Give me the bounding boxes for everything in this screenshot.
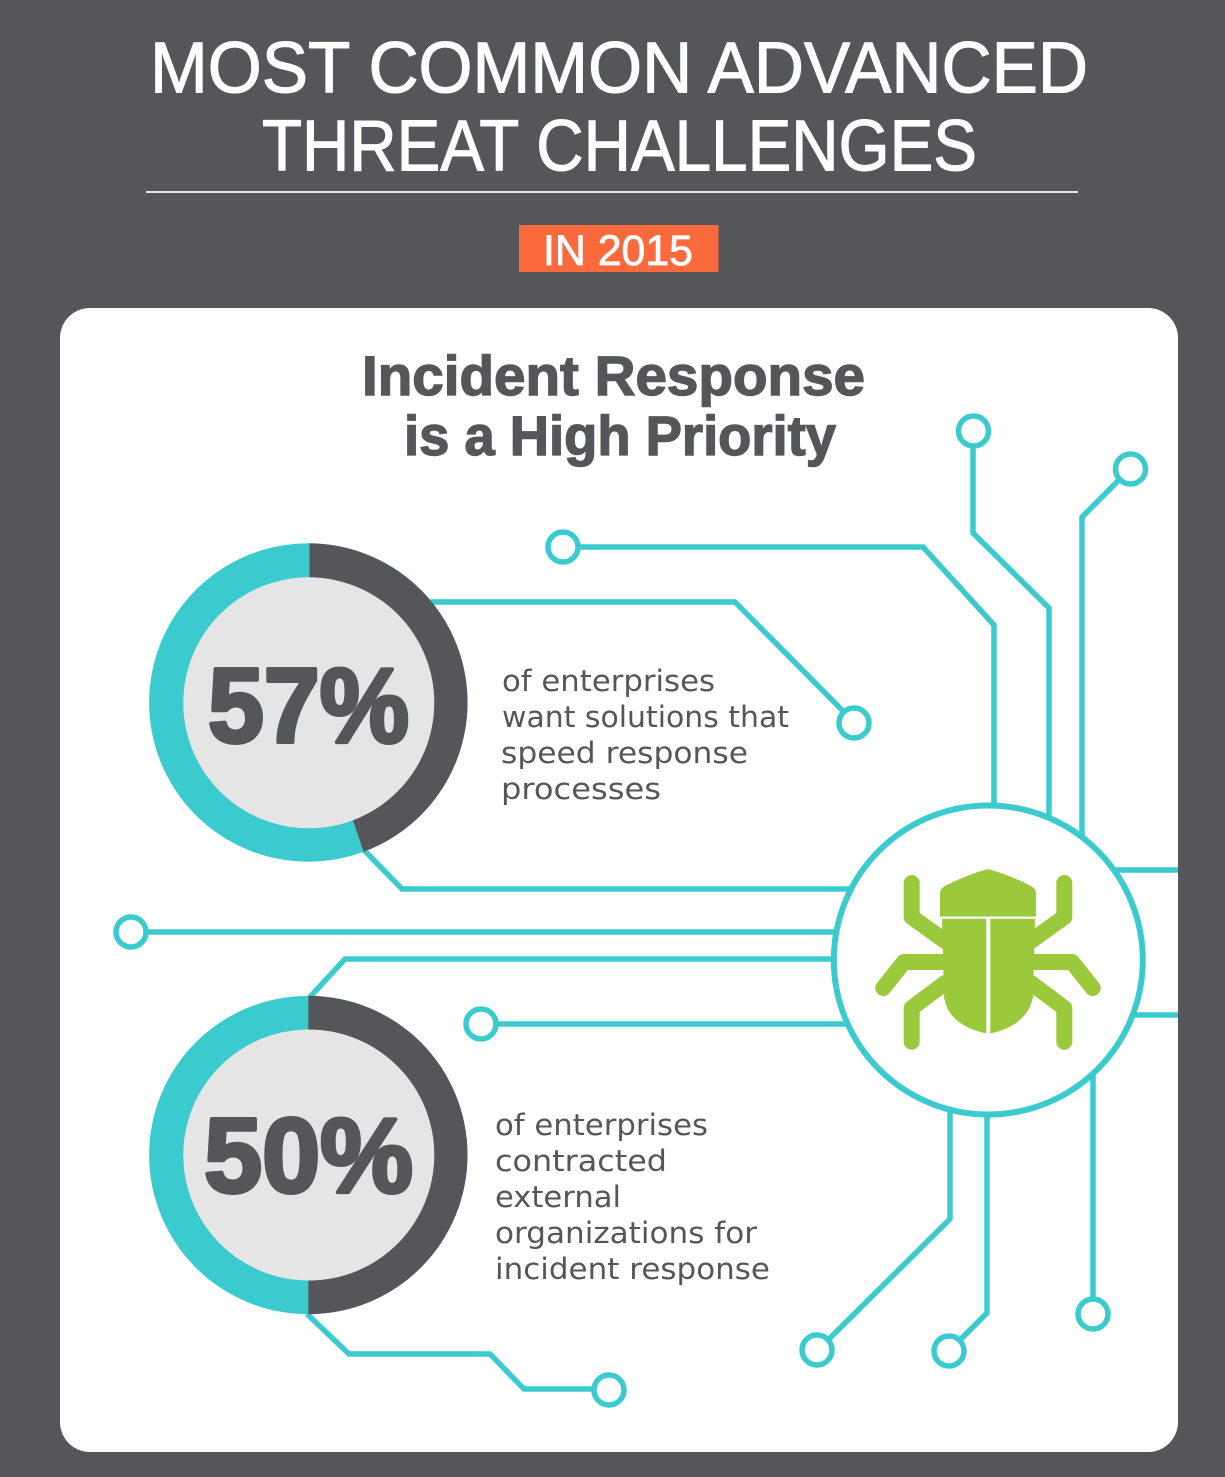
text: 57% description: processes	[501, 772, 661, 806]
icon: bug	[883, 869, 1093, 1042]
bug hub circle	[834, 806, 1143, 1114]
text: 50% description	[495, 1108, 770, 1286]
title: THREAT CHALLENGES	[262, 106, 977, 186]
text: 50% description: external	[495, 1180, 621, 1214]
text: 50% description: incident response	[495, 1252, 770, 1286]
circuit nodes	[116, 416, 1146, 1405]
donut: 50%	[149, 996, 468, 1314]
donut: 57%: 57%	[208, 647, 409, 765]
panel: incident response	[60, 308, 1178, 1452]
title	[150, 28, 1088, 186]
heading	[362, 344, 865, 467]
text: 57% description: want solutions that	[502, 700, 789, 734]
text: 50% description: contracted	[495, 1144, 667, 1178]
donut: 57%	[149, 543, 468, 862]
heading: Incident Response	[362, 344, 865, 407]
heading: is a High Priority	[404, 404, 836, 467]
circuit lines	[146, 446, 1178, 1389]
text: 57% description	[501, 664, 789, 806]
text: 50% description: organizations for	[495, 1216, 757, 1250]
text: 57% description: of enterprises	[502, 664, 715, 698]
title: MOST COMMON ADVANCED	[150, 28, 1088, 108]
text: 57% description: speed response	[501, 736, 748, 770]
badge: in 2015: IN 2015	[543, 227, 693, 275]
text: 50% description: of enterprises	[495, 1108, 708, 1142]
donut: 50%: 50%	[204, 1097, 413, 1215]
